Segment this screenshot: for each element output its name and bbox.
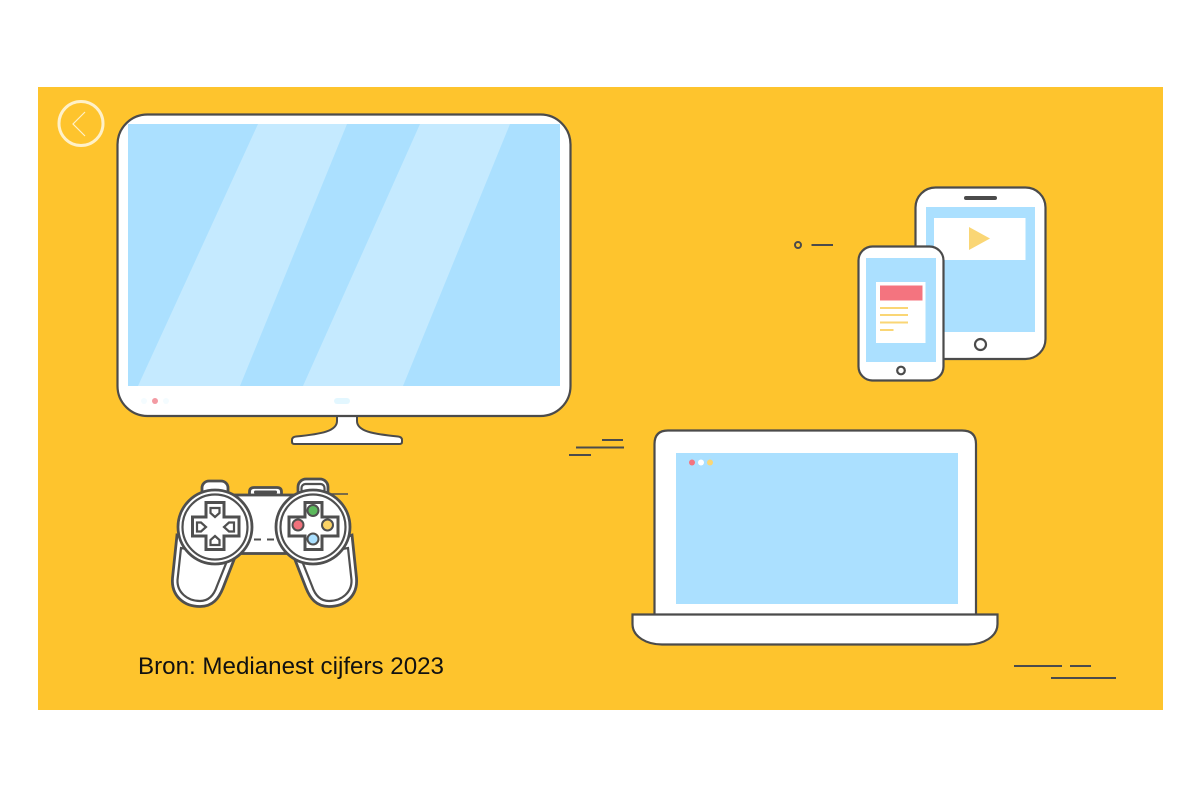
tablet home button <box>975 339 986 350</box>
phone home button <box>897 367 905 374</box>
article text lines <box>880 307 908 331</box>
green button <box>308 505 318 516</box>
phone illustration <box>858 246 944 380</box>
left grip <box>172 535 237 606</box>
yellow button <box>322 520 333 530</box>
gamepad body <box>225 495 305 554</box>
red button <box>292 520 304 530</box>
laptop base <box>632 614 998 644</box>
decorative dot and dash <box>795 242 833 248</box>
source caption: Bron: Medianest cijfers 2023 <box>138 653 444 680</box>
article card <box>876 282 926 343</box>
motion lines bottom right <box>1014 666 1116 678</box>
right pad <box>276 490 350 564</box>
screen reflection left <box>138 124 347 386</box>
right bumper <box>298 479 328 499</box>
icon: play triangle <box>969 227 990 250</box>
window dots <box>689 460 713 466</box>
article header <box>880 286 922 300</box>
monitor indicator lights <box>141 398 350 404</box>
inner cross fill <box>292 505 336 547</box>
tablet video card <box>934 218 1026 260</box>
blue button <box>308 534 318 544</box>
motion lines near laptop <box>569 440 624 455</box>
middle dashes <box>254 538 274 540</box>
directional cross <box>192 502 239 550</box>
left bumper <box>202 481 228 499</box>
panel: yellow background <box>38 87 1163 710</box>
laptop lid <box>654 430 976 615</box>
tablet screen <box>926 207 1035 332</box>
monitor stand <box>292 415 402 444</box>
monitor illustration <box>118 114 570 444</box>
inner cross fill <box>195 505 236 547</box>
tablet frame <box>916 188 1046 359</box>
monitor screen <box>128 124 560 386</box>
right grip <box>292 535 357 606</box>
tablet illustration <box>916 188 1046 359</box>
phone frame <box>858 246 944 380</box>
centre button <box>250 488 282 498</box>
left pad <box>178 490 252 564</box>
tablet speaker <box>964 196 997 200</box>
gamepad illustration <box>172 479 357 606</box>
screen reflection right <box>303 124 510 386</box>
phone screen <box>866 258 936 362</box>
line behind gamepad <box>327 493 348 495</box>
laptop illustration <box>632 430 998 644</box>
direction arrows <box>197 508 234 545</box>
icon: back button <box>59 102 103 146</box>
laptop screen <box>676 453 958 604</box>
monitor frame <box>118 114 570 416</box>
